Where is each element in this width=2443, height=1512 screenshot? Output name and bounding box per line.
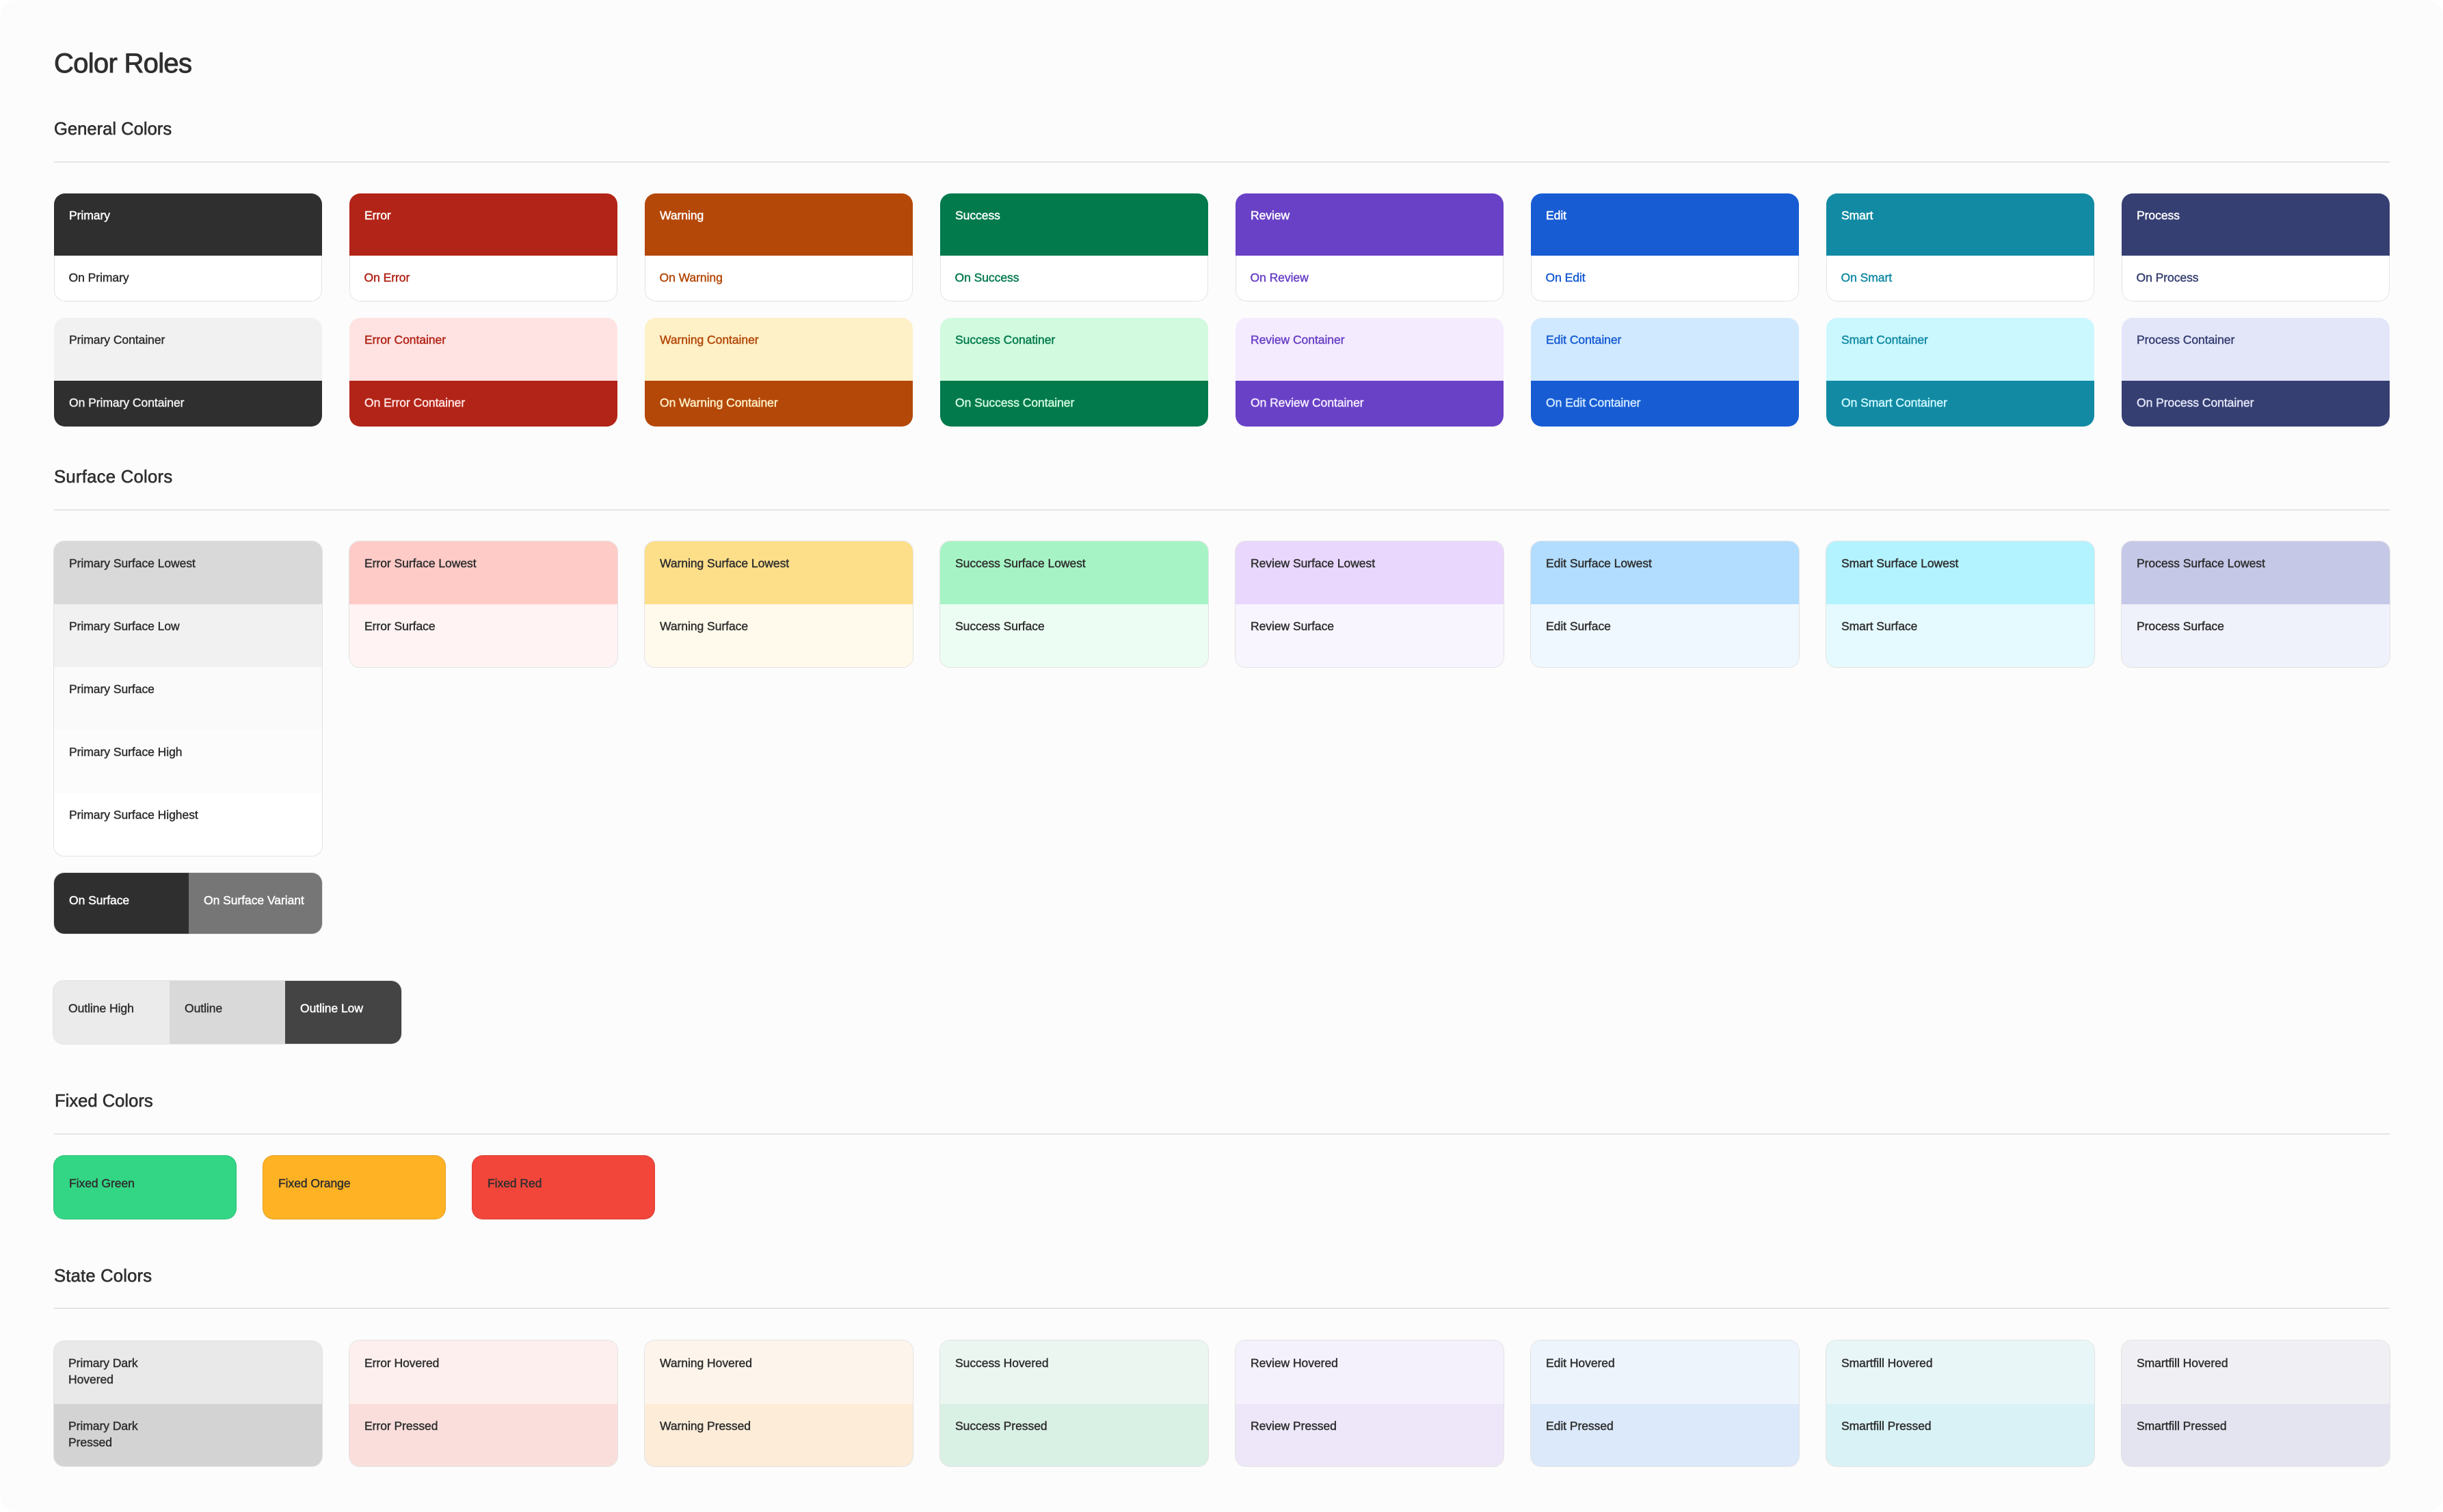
swatch: error: [349, 193, 617, 301]
swatch: fixed green: [53, 1155, 237, 1219]
swatch: edit: On Edit: [1545, 271, 1586, 284]
swatch: warning states: Warning Pressed: [660, 1419, 751, 1433]
swatch: error surface: [349, 541, 618, 668]
swatch: review container: On Review Container: [1251, 396, 1364, 409]
swatch: process: Process: [2137, 208, 2180, 222]
swatch: smart surface: Smart Surface: [1841, 619, 1917, 633]
swatch: success surface: Success Surface Lowest: [955, 556, 1086, 570]
swatch: warning states: Warning Hovered: [660, 1356, 752, 1370]
swatch: process surface: [2121, 541, 2390, 668]
swatch: success: Success: [955, 208, 1000, 222]
swatch: review: [1236, 193, 1504, 301]
swatch: process: [2122, 193, 2390, 301]
swatch pair: on surface: [53, 872, 323, 934]
swatch: review states: Review Hovered: [1251, 1356, 1338, 1370]
swatch: error surface: Error Surface: [364, 619, 436, 633]
swatch stack: primary surfaces: Primary Surface High: [69, 745, 183, 759]
swatch: smart: Smart: [1841, 208, 1873, 222]
swatch: review: Review: [1251, 208, 1290, 222]
swatch: primary container: On Primary Container: [69, 396, 184, 409]
swatch: process: On Process: [2136, 271, 2199, 284]
swatch: process container: Process Container: [2137, 333, 2234, 347]
swatch: edit states: Edit Hovered: [1546, 1356, 1615, 1370]
swatch: edit states: [1530, 1340, 1800, 1467]
swatch: error states: [349, 1340, 618, 1467]
swatch: success: [940, 193, 1208, 301]
swatch: review: On Review: [1250, 271, 1309, 284]
swatch pair: on surface: On Surface Variant: [204, 893, 304, 907]
swatch: error container: Error Container: [364, 333, 446, 347]
swatch: fixed orange: Fixed Orange: [278, 1176, 351, 1190]
swatch: edit container: Edit Container: [1546, 333, 1621, 347]
swatch: warning: On Warning: [659, 271, 723, 284]
swatch: fixed orange: [263, 1155, 446, 1219]
swatch: process states: Smartfill Pressed: [2137, 1419, 2227, 1433]
swatch: smart states: Smartfill Hovered: [1841, 1356, 1933, 1370]
swatch: smart container: Smart Container: [1841, 333, 1928, 347]
swatch: warning container: [645, 318, 913, 427]
swatch: success surface: Success Surface: [955, 619, 1045, 633]
swatch: primary container: [54, 318, 322, 427]
swatch: review surface: [1235, 541, 1504, 668]
swatch: success: On Success: [954, 271, 1019, 284]
swatch: edit states: Edit Pressed: [1546, 1419, 1614, 1433]
swatch: success container: Success Conatiner: [955, 333, 1055, 347]
heading: general colors: General Colors: [54, 120, 172, 139]
swatch: smart states: [1826, 1340, 2095, 1467]
swatch: primary dark states: Pressed: [68, 1435, 112, 1449]
swatch: edit: [1531, 193, 1799, 301]
swatch: primary: [54, 193, 322, 301]
swatch: error: On Error: [364, 271, 410, 284]
swatch: fixed red: Fixed Red: [488, 1176, 542, 1190]
swatch trio: outlines: Outline: [185, 1001, 222, 1015]
swatch: edit surface: Edit Surface: [1546, 619, 1611, 633]
swatch: warning surface: [644, 541, 913, 668]
swatch pair: on surface: On Surface: [69, 893, 129, 907]
swatch: fixed red: [472, 1155, 655, 1219]
swatch: primary container: Primary Container: [69, 333, 165, 347]
swatch: error: Error: [364, 208, 391, 222]
swatch: process states: Smartfill Hovered: [2137, 1356, 2228, 1370]
swatch trio: outlines: Outline Low: [300, 1001, 363, 1015]
swatch stack: primary surfaces: Primary Surface Low: [69, 619, 180, 633]
swatch: smart container: On Smart Container: [1841, 396, 1947, 409]
swatch: primary dark states: Hovered: [68, 1373, 114, 1386]
swatch: review container: [1236, 318, 1504, 427]
swatch: error states: Error Pressed: [364, 1419, 438, 1433]
swatch: success states: Success Pressed: [955, 1419, 1047, 1433]
swatch: fixed green: Fixed Green: [69, 1176, 135, 1190]
swatch trio: outlines: [53, 980, 402, 1044]
swatch: success surface: [939, 541, 1209, 668]
swatch stack: primary surfaces: Primary Surface Lowest: [69, 556, 196, 570]
swatch: error container: On Error Container: [364, 396, 465, 409]
swatch stack: primary surfaces: [53, 541, 323, 856]
swatch stack: primary surfaces: Primary Surface: [69, 682, 155, 696]
swatch: process container: [2122, 318, 2390, 427]
heading: fixed colors: Fixed Colors: [55, 1092, 153, 1111]
swatch: edit: Edit: [1546, 208, 1566, 222]
swatch: edit surface: [1530, 541, 1800, 668]
swatch: error states: Error Hovered: [364, 1356, 439, 1370]
swatch: process surface: Process Surface: [2137, 619, 2224, 633]
swatch: review container: Review Container: [1251, 333, 1344, 347]
swatch: process surface: Process Surface Lowest: [2137, 556, 2265, 570]
swatch: warning container: On Warning Container: [660, 396, 778, 409]
swatch trio: outlines: Outline High: [68, 1001, 134, 1015]
swatch: edit surface: Edit Surface Lowest: [1546, 556, 1652, 570]
swatch: primary dark states: [53, 1340, 323, 1467]
swatch: success container: [940, 318, 1208, 427]
swatch: primary dark states: Primary Dark: [68, 1419, 138, 1433]
swatch: error surface: Error Surface Lowest: [364, 556, 477, 570]
swatch: smart surface: [1826, 541, 2095, 668]
swatch: edit container: [1531, 318, 1799, 427]
swatch: edit container: On Edit Container: [1546, 396, 1640, 409]
swatch: review states: [1235, 1340, 1504, 1467]
heading: state colors: State Colors: [54, 1267, 152, 1286]
swatch: warning: [645, 193, 913, 301]
swatch: smart: [1826, 193, 2094, 301]
swatch: smart states: Smartfill Pressed: [1841, 1419, 1932, 1433]
swatch: success container: On Success Container: [955, 396, 1074, 409]
swatch: primary: Primary: [69, 208, 110, 222]
swatch stack: primary surfaces: Primary Surface Highest: [69, 808, 198, 822]
swatch: warning states: [644, 1340, 913, 1467]
swatch: warning: Warning: [660, 208, 704, 222]
swatch: process container: On Process Container: [2137, 396, 2254, 409]
swatch: primary: On Primary: [68, 271, 129, 284]
swatch: warning surface: Warning Surface: [660, 619, 748, 633]
swatch: smart container: [1826, 318, 2094, 427]
swatch: review surface: Review Surface: [1251, 619, 1334, 633]
swatch: warning surface: Warning Surface Lowest: [660, 556, 789, 570]
swatch: error container: [349, 318, 617, 427]
swatch: review states: Review Pressed: [1251, 1419, 1337, 1433]
swatch: warning container: Warning Container: [660, 333, 759, 347]
swatch: success states: Success Hovered: [955, 1356, 1049, 1370]
swatch: process states: [2121, 1340, 2390, 1467]
swatch: smart: On Smart: [1841, 271, 1892, 284]
title: Color Roles: [54, 49, 191, 79]
swatch: primary dark states: Primary Dark: [68, 1356, 138, 1370]
heading: surface colors: Surface Colors: [54, 468, 172, 487]
swatch: success states: [939, 1340, 1209, 1467]
swatch: review surface: Review Surface Lowest: [1251, 556, 1375, 570]
swatch: smart surface: Smart Surface Lowest: [1841, 556, 1958, 570]
